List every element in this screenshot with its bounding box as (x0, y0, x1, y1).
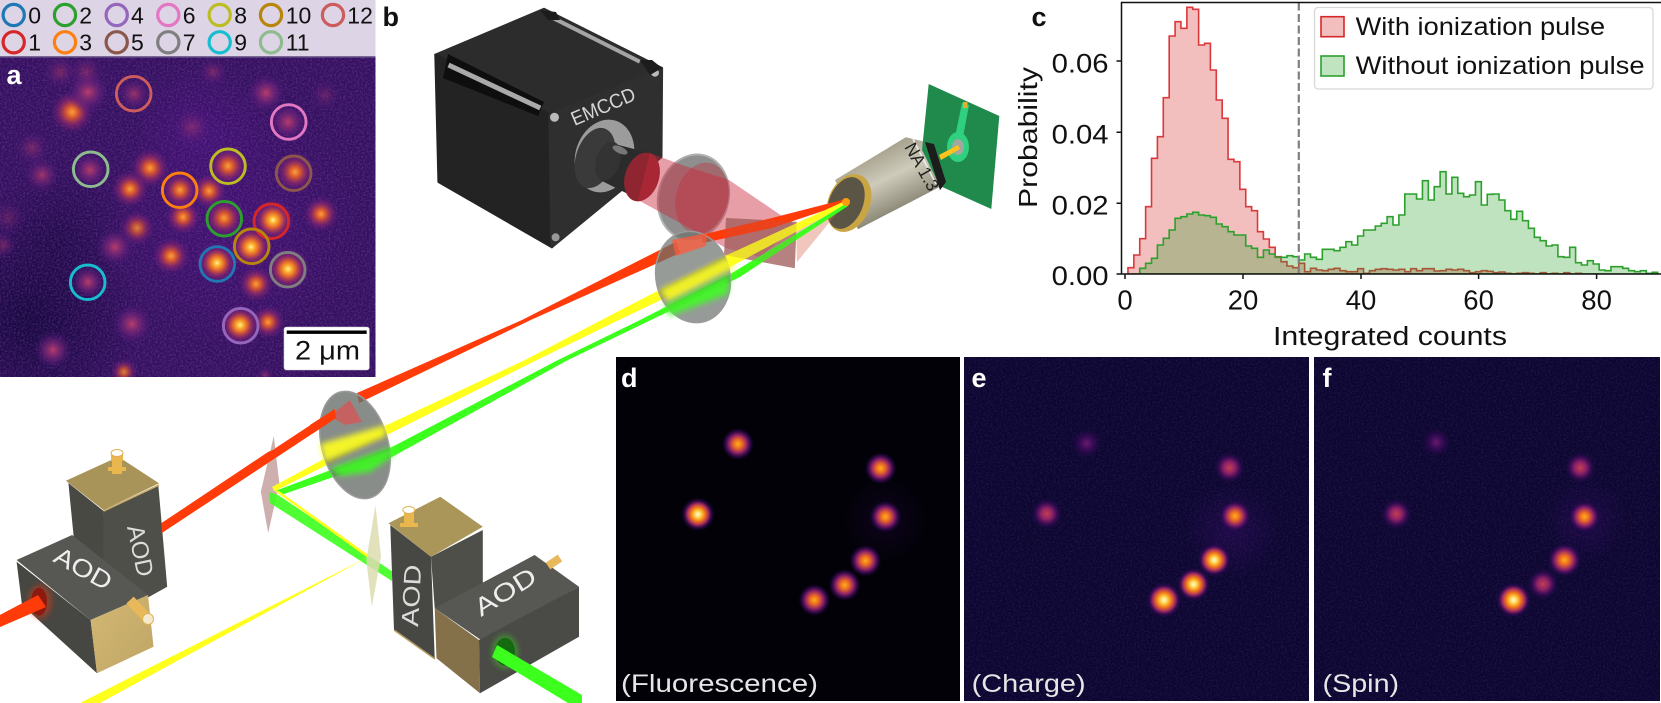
caption: fluorescence: (Fluorescence) (621, 670, 818, 698)
upright AOD left (66, 450, 167, 607)
panel b: optical setup illustration (0, 9, 999, 703)
beam: yellow fold to right (272, 489, 370, 558)
panel f: spin image (1314, 357, 1660, 701)
upright AOD right (388, 497, 483, 659)
caption: spin: (Spin) (1322, 670, 1399, 698)
legend of site markers: 5 (131, 30, 144, 56)
beam: red to lower lens entry (310, 409, 336, 434)
panel label d: d (621, 363, 638, 393)
beam: yellow input (80, 556, 370, 703)
beam: red input (0, 595, 46, 627)
panel c: probability histogram (1013, 2, 1661, 351)
legend of site markers: 4 (131, 2, 144, 28)
beam: yellow upper path (385, 200, 848, 436)
legend of site markers: 7 (183, 30, 195, 56)
horizontal AOD right: AOD (469, 562, 542, 622)
panel label c: c (1032, 2, 1047, 32)
x axis title: Integrated counts (1273, 323, 1507, 351)
dichroic mirror (724, 218, 797, 268)
legend of site markers: 2 (79, 2, 92, 28)
plot frame and ticks (1116, 2, 1661, 279)
horizontal AOD left: AOD (49, 542, 117, 596)
histogram bars (1128, 2, 1658, 274)
legend of site markers (0, 0, 376, 58)
y tick labels: 0.06 (1052, 49, 1109, 79)
lens: lower lens (308, 383, 402, 507)
objective: NA 1.3: NA 1.3 (901, 139, 943, 194)
panel d: fluorescence image (616, 357, 960, 701)
y tick labels: 0.04 (1052, 119, 1109, 149)
series: with ionization pulse (1128, 7, 1599, 274)
panel label b: b (382, 2, 399, 32)
histogram legend: With ionization pulse (1356, 13, 1605, 41)
panel label a: a (6, 60, 22, 90)
x tick labels: 60 (1463, 284, 1494, 316)
panel label f: f (1322, 363, 1332, 393)
y axis title: Probability (1013, 67, 1043, 208)
y tick labels: 0.02 (1052, 190, 1109, 220)
legend of site markers: 6 (183, 2, 195, 28)
beam: green upper path (392, 203, 848, 457)
lens: collection lens (648, 146, 738, 248)
legend of site markers: 11 (286, 30, 310, 56)
lens: middle lens (647, 224, 739, 330)
beam: green fold to right AOD (269, 492, 393, 581)
sample: microwave chip (922, 84, 999, 209)
image background (0, 58, 376, 377)
AOD pair: yellow and green path (388, 497, 582, 703)
legend of site markers: 9 (234, 30, 247, 56)
focus glow at objective (842, 198, 850, 206)
histogram legend: Without ionization pulse (1356, 52, 1645, 80)
legend of site markers: 0 (28, 2, 41, 28)
legend of site markers: 10 (286, 2, 311, 28)
mirror: left folding lens (261, 436, 279, 533)
x tick labels: 40 (1346, 284, 1376, 316)
camera: EMCCD: EMCCD (568, 84, 639, 131)
upright AOD right: AOD (397, 564, 427, 627)
legend of site markers: 3 (79, 30, 92, 56)
camera: EMCCD (436, 9, 666, 247)
histogram legend (1314, 8, 1653, 89)
beam: red upper path (162, 409, 336, 533)
beam: yellow fold (272, 426, 385, 491)
horizontal AOD right (435, 555, 579, 693)
panel label e: e (972, 363, 987, 393)
legend of site markers: 1 (28, 30, 41, 56)
series: without ionization pulse (1128, 172, 1658, 274)
beam: red through mirror (162, 409, 336, 533)
panel a: fluorescence image with site markers (0, 0, 376, 377)
threshold line (1298, 2, 1300, 274)
y tick labels: 0.00 (1052, 261, 1109, 291)
legend of site markers: 12 (347, 2, 373, 28)
upright AOD left: AOD (121, 523, 158, 579)
mirror: right folding lens (366, 505, 381, 607)
beam: green input (492, 645, 582, 703)
scale bar: 2 μm (295, 336, 360, 366)
x tick labels (1117, 284, 1612, 316)
dichroic overlay on beams (724, 218, 797, 268)
x tick labels: 0 (1117, 284, 1133, 316)
y tick labels (1052, 49, 1109, 291)
objective: NA 1.3 (818, 137, 946, 239)
legend of site markers: 8 (234, 2, 247, 28)
x tick labels: 80 (1581, 284, 1612, 316)
beam: green fold (275, 447, 392, 495)
AOD pair: red path (0, 450, 167, 673)
scale bar (284, 327, 369, 370)
detection beam: translucent red cone (638, 153, 797, 257)
reflected detection cone to objective (796, 202, 846, 262)
caption: charge: (Charge) (972, 670, 1086, 698)
panel e: charge image (964, 357, 1309, 701)
horizontal AOD left (0, 535, 154, 673)
site markers (70, 76, 311, 343)
x tick labels: 20 (1228, 284, 1258, 316)
